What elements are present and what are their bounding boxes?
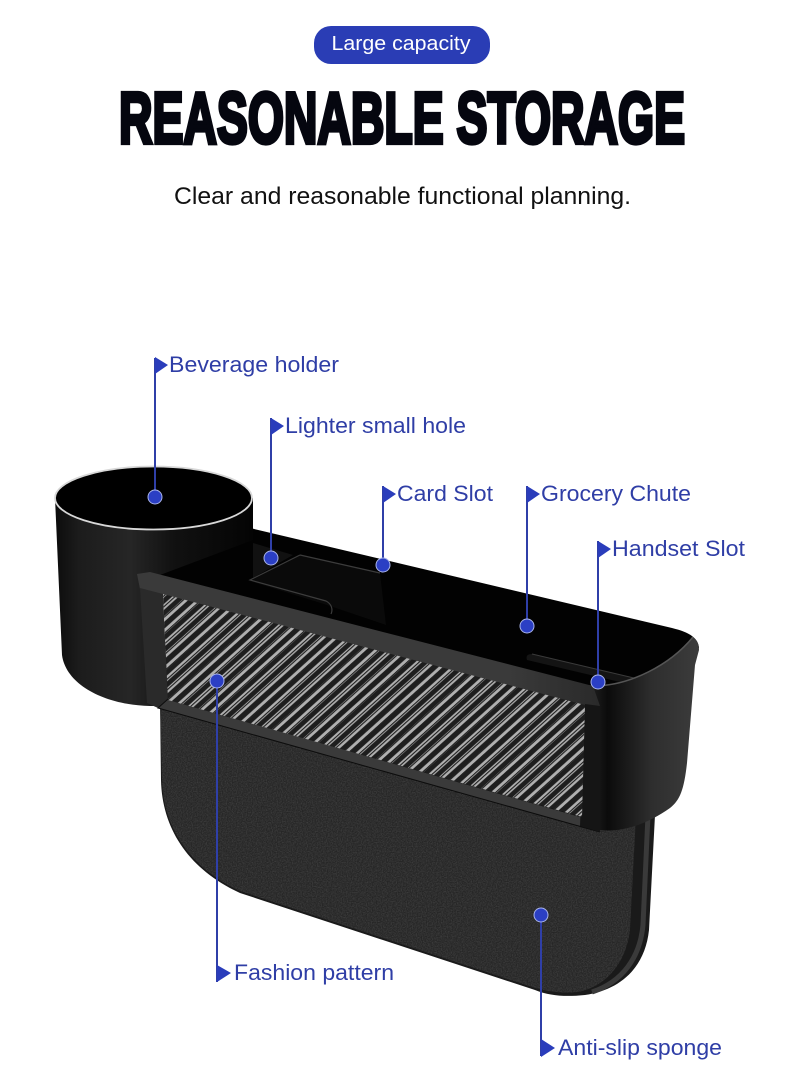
callout: Card Slot <box>376 481 493 572</box>
callout: Beverage holder: Beverage holder <box>169 352 339 377</box>
callout: Grocery Chute <box>520 481 691 633</box>
cup holder <box>55 466 253 706</box>
callout: Fashion pattern: Fashion pattern <box>234 960 394 985</box>
callout: Grocery Chute: Grocery Chute <box>541 481 691 506</box>
callout: Anti-slip sponge: Anti-slip sponge <box>558 1035 722 1060</box>
callout: Beverage holder <box>148 352 339 504</box>
subtitle: Clear and reasonable functional planning. <box>174 183 631 210</box>
callout: Card Slot: Card Slot <box>397 481 493 506</box>
organizer end cap <box>582 637 699 830</box>
organizer interior <box>137 528 699 690</box>
carbon fibre panel <box>163 594 585 817</box>
badge: Large capacity <box>314 26 490 64</box>
badge: Large capacity: Large capacity <box>332 33 470 55</box>
callout: Lighter small hole <box>264 413 466 565</box>
callout: Lighter small hole: Lighter small hole <box>285 413 466 438</box>
product: car seat gap organizer <box>55 466 699 996</box>
callout: Handset Slot <box>591 536 745 689</box>
anti-slip sponge panel <box>160 700 655 996</box>
organizer rim and front face <box>137 572 693 832</box>
callout: Handset Slot: Handset Slot <box>612 536 745 561</box>
callout: Anti-slip sponge <box>534 908 722 1060</box>
callout: Fashion pattern <box>210 674 394 985</box>
